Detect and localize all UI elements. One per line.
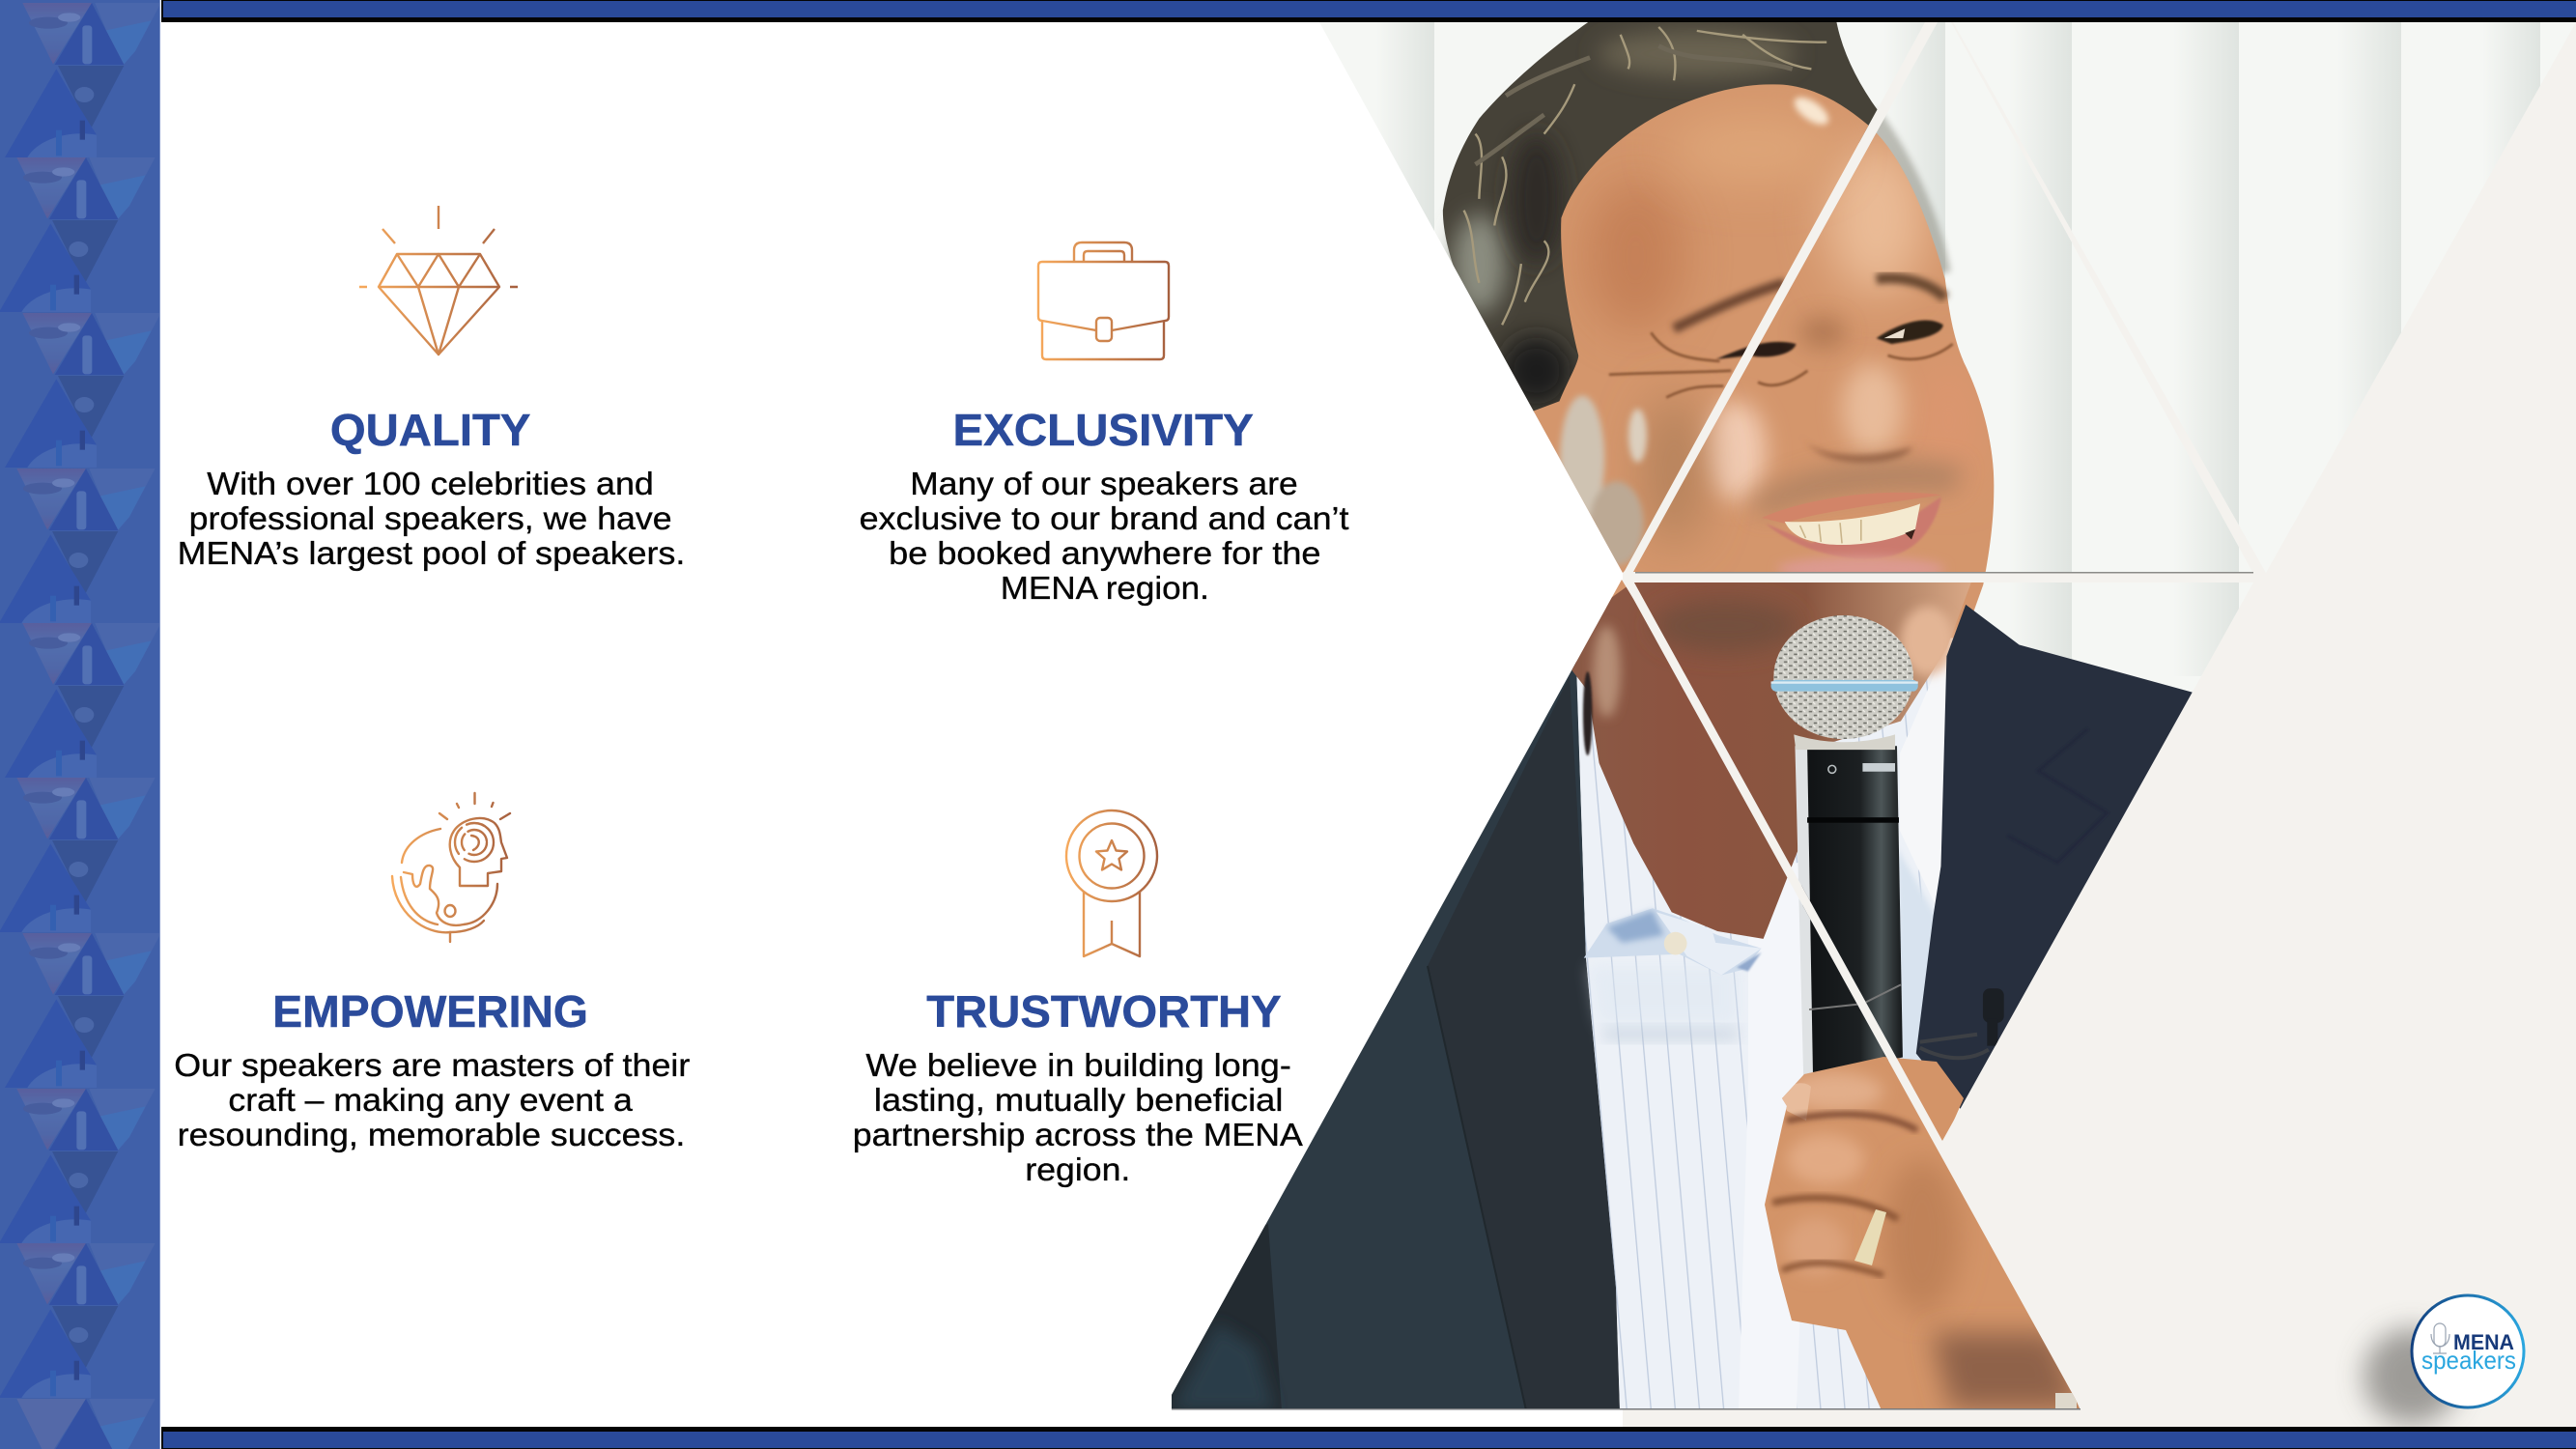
heading: quality: QUALITY [330, 405, 530, 455]
photo: smiling speaker with microphone in triangular frames [1159, 0, 2576, 1410]
text: empowering description: Our speakers are masters of their [174, 1047, 690, 1083]
text: trustworthy description: partnership across the MENA [853, 1117, 1303, 1152]
heading: exclusivity: EXCLUSIVITY [952, 405, 1254, 455]
panel: patterned blue sidebar [0, 0, 161, 1449]
text: exclusivity description: Many of our speakers are [910, 466, 1298, 501]
heading: empowering: EMPOWERING [272, 986, 588, 1037]
text: trustworthy description: region. [1025, 1151, 1130, 1187]
photo: moustache stubble [1746, 461, 1965, 516]
text: exclusivity description [860, 466, 1348, 606]
icon: globe and head [392, 793, 510, 942]
photo: microphone [1771, 615, 1918, 1076]
photo: white sideburn [1560, 395, 1647, 565]
text: trustworthy description: We believe in building long- [865, 1047, 1291, 1083]
photo: shirt [1576, 638, 1946, 1410]
logo: MENA speakers badge [2364, 1295, 2524, 1425]
panel: trustworthy [853, 810, 1303, 1187]
logo wordmark MENA: MENA [2453, 1330, 2514, 1354]
text: exclusivity description: exclusive to our brand and can’t [860, 500, 1348, 536]
text: quality description: MENA’s largest pool of speakers. [178, 535, 685, 571]
icon: briefcase [1038, 242, 1169, 359]
logo wordmark speakers: speakers [2421, 1346, 2516, 1375]
text: quality description: With over 100 celebrities and [207, 466, 654, 501]
photo: facial skin [1534, 84, 1994, 638]
top bar [161, 0, 2576, 22]
photo: eyes and eyebrows [1609, 278, 1953, 397]
text: empowering description [174, 1047, 690, 1152]
text: quality description [178, 466, 685, 571]
bottom bar [161, 1427, 2576, 1449]
photo: smile [1762, 493, 1941, 558]
logo microphone icon [2431, 1323, 2449, 1353]
photo: left jacket [1159, 657, 1620, 1410]
text: empowering description: craft – making any event a [228, 1082, 633, 1118]
photo: wedding ring [1854, 1209, 1886, 1265]
photo frame hairlines [1172, 572, 2253, 1410]
logo shadow [2364, 1328, 2460, 1425]
photo: nose [1810, 445, 1912, 466]
icon: medal [1066, 810, 1157, 956]
panel: empowering [174, 793, 690, 1152]
text: empowering description: resounding, memorable success. [178, 1117, 685, 1152]
photo: hand holding microphone [1765, 1057, 2081, 1408]
panel: quality [178, 206, 685, 571]
text: trustworthy description: lasting, mutually beneficial [874, 1082, 1283, 1118]
photo: right jacket [1916, 605, 2214, 1111]
panel: exclusivity [860, 242, 1348, 606]
photo: head and face [1443, 8, 2041, 668]
text: trustworthy description [853, 1047, 1303, 1187]
icon: diamond [359, 206, 518, 355]
logo disc [2412, 1295, 2524, 1407]
text: quality description: professional speakers, we have [189, 500, 672, 536]
photo: neck [1561, 582, 1971, 975]
photo: lavalier microphone [1920, 988, 2004, 1058]
text: exclusivity description: be booked anywhere for the [889, 535, 1321, 571]
photo: shirt collar button [1664, 932, 1687, 955]
text: exclusivity description: MENA region. [1001, 570, 1209, 606]
heading: trustworthy: TRUSTWORTHY [926, 986, 1282, 1037]
photo: hair [1443, 8, 1951, 412]
